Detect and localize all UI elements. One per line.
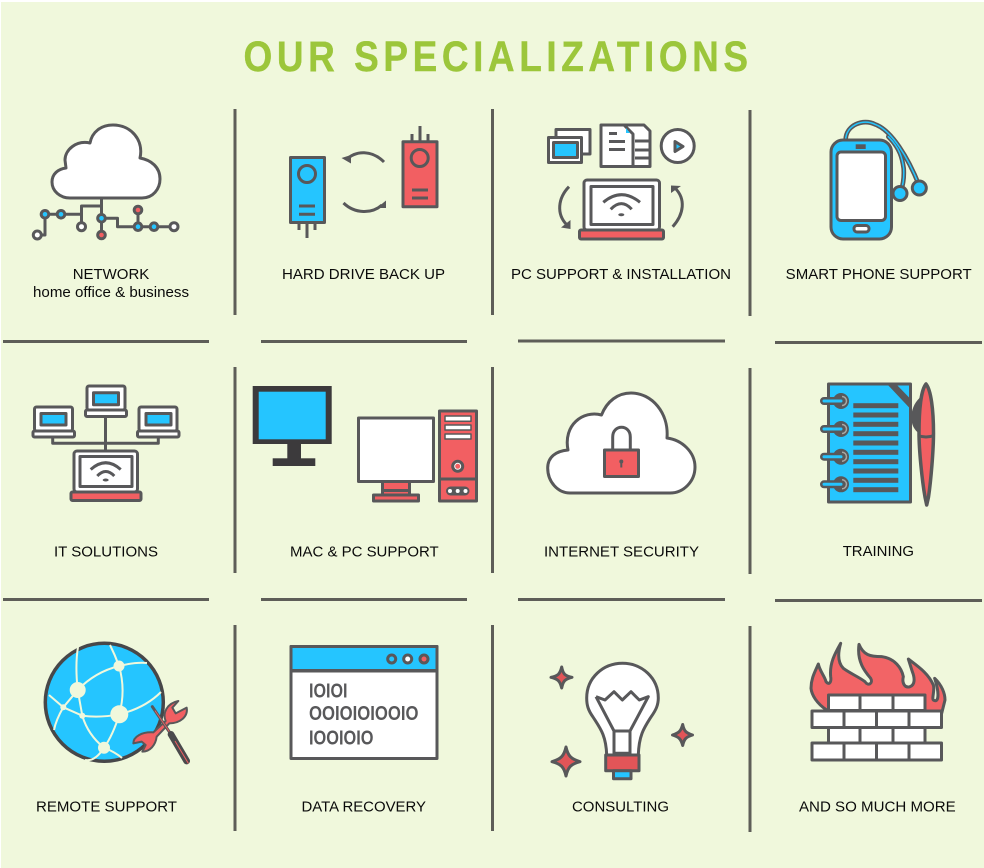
label: network: home office & business (33, 284, 189, 301)
icon: smartphone with earphones (831, 122, 926, 239)
panel: remote support (36, 643, 188, 816)
label: it solutions: IT SOLUTIONS (54, 544, 158, 561)
icon: cloud with padlock (548, 393, 695, 493)
label: remote support: REMOTE SUPPORT (36, 799, 177, 816)
panel: internet security (544, 393, 699, 561)
icon: browser window with binary: IOIOI (309, 680, 348, 702)
icon: cloud with circuit nodes (33, 125, 178, 239)
label: hard drive back up: HARD DRIVE BACK UP (282, 266, 445, 283)
label: network (33, 266, 189, 301)
panel: training (824, 384, 934, 560)
label: data recovery: DATA RECOVERY (302, 799, 426, 816)
panel: and so much more (799, 643, 956, 816)
panel: mac and pc support (253, 386, 476, 561)
panel: pc support and installation (511, 125, 731, 283)
label: pc support and installation: PC SUPPORT & INSTALLATION (511, 266, 731, 283)
title: OUR SPECIALIZATIONS (244, 34, 748, 81)
icon: media files and laptop (548, 125, 694, 239)
icon: browser window with binary (291, 646, 437, 758)
panel: data recovery (291, 646, 437, 816)
panel: hard drive back up (282, 126, 445, 283)
label: smart phone support: SMART PHONE SUPPORT (786, 266, 972, 283)
label: internet security: INTERNET SECURITY (544, 544, 699, 561)
icon: laptops network (33, 386, 179, 500)
label: training: TRAINING (843, 543, 914, 560)
icon: light bulb with sparkles (551, 663, 692, 779)
icon: desktop computers (253, 386, 476, 501)
icon: browser window with binary: IOOIOIO (309, 727, 374, 749)
icon: two drives with sync arrows (290, 126, 437, 238)
panel: consulting (551, 663, 692, 816)
label: mac and pc support: MAC & PC SUPPORT (290, 544, 439, 561)
label: network: NETWORK (73, 266, 149, 283)
label: and so much more: AND SO MUCH MORE (799, 799, 956, 816)
label: consulting: CONSULTING (572, 799, 669, 816)
icon: notebook and pen (824, 384, 934, 505)
panel: smart phone support (786, 122, 972, 283)
icon: browser window with binary: OOIOIOIOOIO (309, 703, 418, 725)
icon: brick firewall with flames (811, 643, 945, 760)
panel: network (33, 125, 189, 301)
icon: globe with wrench and screwdriver (45, 643, 188, 763)
panel: it solutions (33, 386, 179, 561)
